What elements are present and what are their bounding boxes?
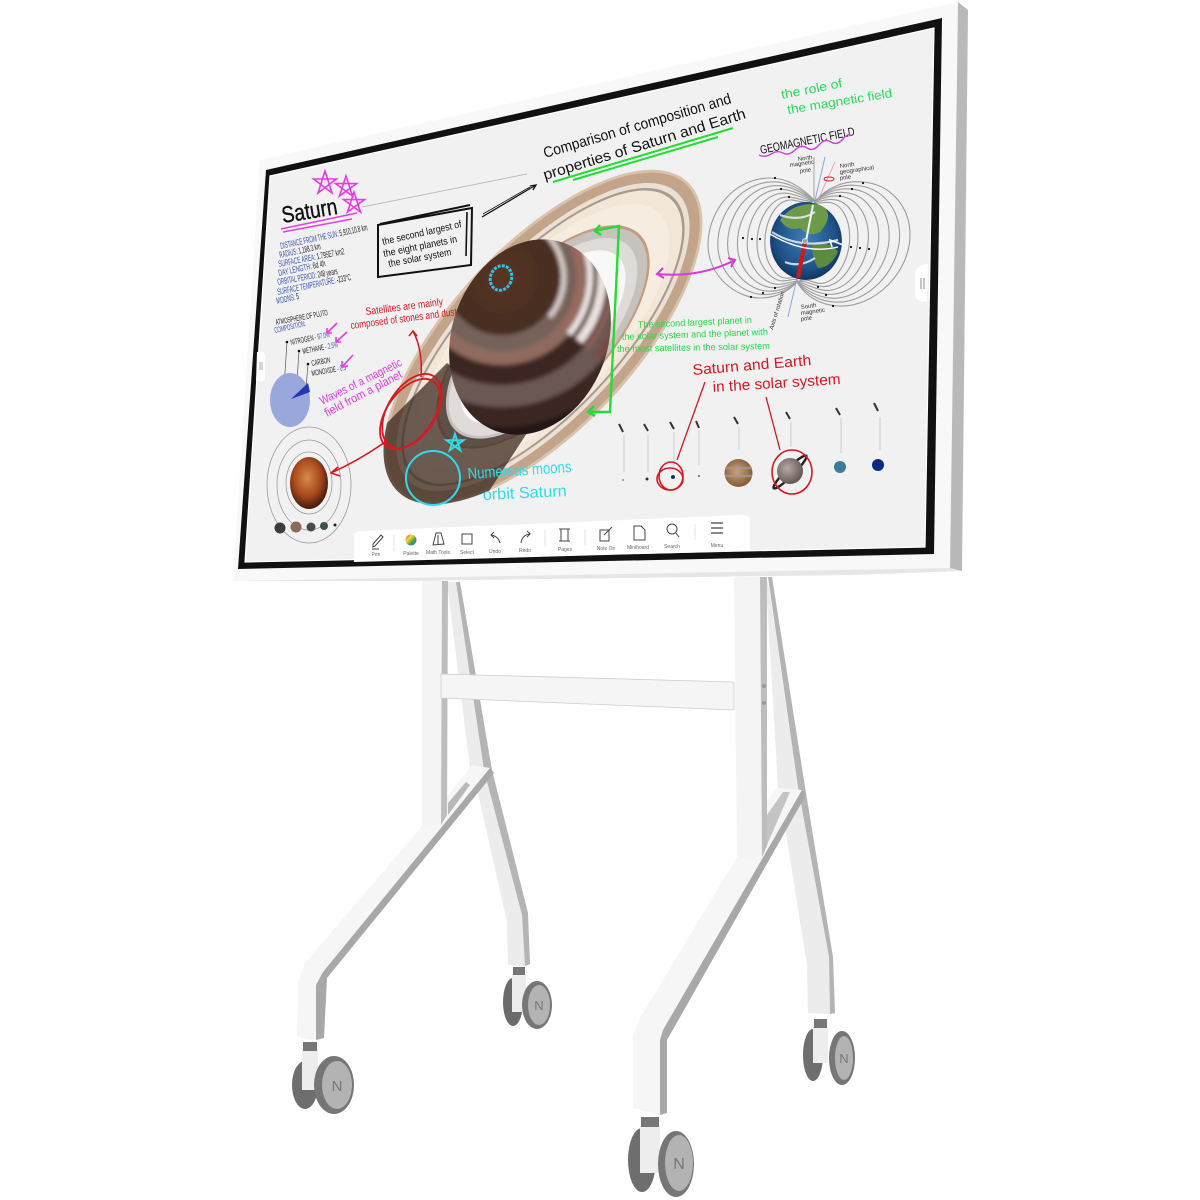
arrow: note to heading: [482, 185, 536, 217]
planet: neptune: [872, 459, 884, 471]
planet: jupiter: [724, 459, 752, 487]
stand: rear right leg: [765, 577, 835, 1014]
green note: second largest planet: The second largest planet in: [638, 315, 752, 331]
green note: second largest planet: the most satellites in the solar system: [617, 341, 770, 355]
diagram labels: magnetic: [800, 308, 825, 317]
heading: comparison: Comparison of composition and: [541, 90, 733, 162]
planet: earth: [671, 475, 675, 479]
atmosphere composition chart: ATMOSPHERE OF PLUTO: [275, 308, 328, 327]
handwritten note box: the second largest of: [381, 219, 463, 248]
diagram labels: pole: [839, 174, 852, 182]
solar system planet row: [619, 382, 884, 494]
atmosphere composition chart: NITROGEN - 97.0%: [290, 330, 331, 347]
icon: magenta stars: [314, 171, 364, 212]
diagram labels: South: [800, 303, 817, 311]
toolbar labels: Math Tools: [426, 550, 451, 556]
planet: venus: [646, 478, 648, 480]
green note: role of magnetic field: [780, 76, 893, 117]
monitor frame: [233, 2, 968, 581]
planet globe: [449, 239, 611, 435]
toolbar labels: Menu: [711, 543, 723, 549]
magenta double arrow: ring to field: [657, 258, 735, 278]
atmosphere composition chart: CARBON: [311, 355, 331, 368]
diagram labels: North: [839, 162, 855, 170]
handwritten magenta note: Waves of a magnetic: [317, 355, 404, 408]
stand: right post: [734, 577, 767, 857]
handwritten magenta note: field from a planet: [322, 367, 405, 420]
planet: saturn: [771, 453, 809, 491]
heading: geomagnetic field: GEOMAGNETIC FIELD: [759, 124, 856, 157]
red note: satellites: [350, 296, 458, 332]
text block: Saturn facts: ORBITAL PERIOD: 248 years: [277, 266, 339, 287]
text block: Saturn facts: RADIUS: 1,188.3 km: [278, 241, 321, 260]
stand: left base leg: [297, 765, 494, 1040]
cyan annotation: moons: Numerous moons: [467, 459, 572, 483]
text block: Saturn facts: SURFACE TEMPERATURE: -233°C: [276, 272, 352, 297]
toolbar labels: Miniboard: [627, 545, 649, 551]
toolbar labels: Redo: [519, 548, 531, 554]
red arrow: up to note: [409, 331, 421, 377]
rings: [331, 119, 755, 555]
rods: [624, 417, 880, 472]
title: Saturn: Saturn: [280, 193, 339, 228]
solar orbit diagram: [267, 427, 351, 543]
toolbar: [354, 515, 750, 562]
atmosphere composition chart: METHANE - 2.5%: [302, 340, 339, 356]
red circle annotation: [368, 364, 454, 460]
diagram labels: North: [797, 155, 813, 163]
atmosphere composition chart: MONOXIDE - 0.5: [311, 363, 347, 378]
diagram labels: Axis of rotation: [769, 291, 787, 331]
cyan ring annotation on pole: [487, 263, 515, 293]
green note: role of magnetic field: the role of: [780, 76, 844, 102]
left side handle: [256, 352, 265, 381]
red note: satellites: composed of stones and dust: [350, 306, 458, 332]
geomagnetic field diagram: [708, 124, 910, 331]
green note: second largest planet: the solar system and the planet with: [622, 327, 768, 343]
cyan annotation: moons: orbit Saturn: [482, 483, 567, 504]
earth axis arrows: [770, 205, 846, 278]
text block: Saturn facts: MOONS: 5: [275, 291, 300, 306]
planet: uranus: [834, 461, 846, 473]
toolbar labels: Palette: [403, 551, 419, 557]
castor: front left: [292, 1042, 354, 1114]
magenta tick arrows: [327, 323, 353, 367]
green bracket arrow: [588, 225, 619, 416]
diagram labels: geographical: [839, 165, 874, 176]
planet shadow on rings: [384, 363, 526, 504]
castor: rear left: N: [534, 998, 544, 1013]
toolbar labels: [372, 543, 723, 558]
line from title: [362, 174, 527, 207]
icon: earth globe: [770, 202, 842, 280]
toolbar labels: Pen: [372, 552, 381, 558]
atmosphere composition chart: [270, 308, 347, 427]
red circles and pointers: [657, 382, 812, 494]
handwritten note box: the eight planets in: [382, 234, 458, 260]
castor: front right: [628, 1117, 694, 1197]
diagram labels: magnetic: [789, 160, 814, 169]
red note: Saturn and Earth: [692, 352, 841, 396]
axis lines: [788, 157, 835, 317]
stand: rear left leg: [447, 582, 530, 966]
red arrow: to orbit diagram: [331, 440, 388, 476]
castor: rear right: N: [839, 1051, 849, 1066]
field markers: [742, 177, 870, 307]
handwritten note box: the solar system: [388, 247, 452, 270]
red note: Saturn and Earth: Saturn and Earth: [692, 352, 812, 379]
castor: front right: N: [673, 1156, 685, 1173]
diagram labels: pole: [799, 167, 812, 175]
text block: Saturn facts: [275, 222, 368, 306]
toolbar labels: Select: [460, 550, 475, 556]
text block: Saturn facts: SURFACE AREA: 1.795E7 km2: [277, 246, 345, 269]
planet: mercury: [622, 479, 624, 481]
green note: second largest planet: [617, 315, 770, 355]
green note: role of magnetic field: the magnetic field: [786, 86, 893, 117]
handwritten note box: [378, 205, 472, 277]
rod heads: [619, 403, 878, 432]
diagram labels: pole: [800, 315, 813, 323]
right side handle: [915, 264, 928, 302]
castor: rear left: [503, 967, 552, 1029]
heading: comparison: properties of Saturn and Earth: [541, 106, 748, 184]
toolbar labels: Pages: [558, 547, 573, 553]
castor: rear right: [803, 1019, 855, 1085]
stand: right base leg: [633, 788, 806, 1115]
diagram labels: [769, 155, 874, 331]
stand: left post: [422, 580, 448, 825]
red note: Saturn and Earth: in the solar system: [712, 371, 841, 396]
field lines: [708, 178, 910, 306]
illustration: display on mobile stand: [235, 2, 968, 1197]
atmosphere composition chart: COMPOSITION:: [273, 319, 307, 335]
stand: crossbar: [441, 674, 734, 710]
Saturn illustration: [384, 170, 702, 504]
toolbar labels: Undo: [489, 549, 501, 555]
planet: mars: [698, 475, 700, 477]
red note: satellites: Satellites are mainly: [365, 296, 444, 318]
toolbar labels: Search: [664, 544, 680, 550]
text block: Saturn facts: DAY LENGTH: 6d 4h: [277, 258, 326, 278]
toolbar labels: Note On: [597, 546, 616, 552]
heading: geomagnetic field: [759, 124, 856, 157]
text block: Saturn facts: DISTANCE FROM THE SUN: 5,910,10.8 km: [279, 222, 368, 251]
icon: palette: [406, 534, 416, 546]
toolbar icons: [372, 523, 723, 551]
cyan annotation: moons: [406, 434, 572, 505]
castor: front left: N: [332, 1078, 342, 1095]
